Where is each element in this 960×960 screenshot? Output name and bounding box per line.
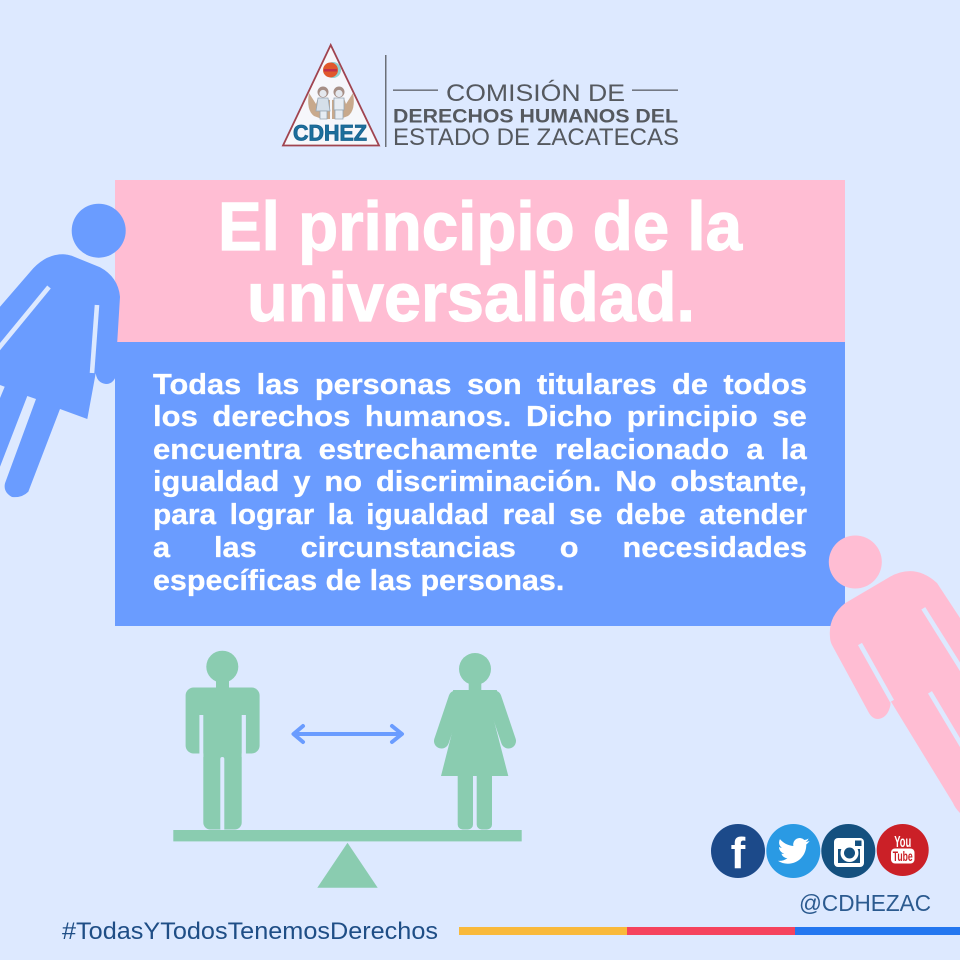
logo text: DERECHOS HUMANOS DEL — [393, 106, 678, 128]
icon: logo sun — [323, 62, 341, 78]
icon: youtube: Tube — [893, 848, 913, 864]
icon: instagram — [821, 824, 875, 878]
logo: CDHEZ — [283, 45, 679, 151]
icon: facebook: f — [731, 829, 746, 878]
logo text: ESTADO DE ZACATECAS — [393, 124, 679, 151]
scale fulcrum — [317, 843, 378, 888]
icon: logo triangle — [283, 45, 379, 146]
body text: encuentra estrechamente relacionado a la — [153, 434, 807, 466]
logo text — [393, 80, 679, 151]
icon: youtube: You — [894, 834, 911, 851]
logo side rule left — [393, 90, 438, 91]
body text: a las circunstancias o necesidades — [153, 532, 807, 564]
body text: específicas de las personas. — [153, 564, 564, 596]
icon: pink man figure — [829, 536, 960, 813]
icon: blue woman figure — [0, 204, 126, 497]
icon: youtube — [877, 824, 929, 876]
icon: twitter — [766, 824, 820, 878]
body text: igualdad y no discriminación. No obstante, — [153, 466, 807, 498]
hashtag: #TodasYTodosTenemosDerechos — [62, 918, 438, 945]
logo text: COMISIÓN DE — [446, 80, 625, 107]
logo acronym: CDHEZ — [293, 120, 367, 146]
panel: body background — [115, 342, 845, 626]
icon: green woman — [441, 653, 508, 830]
title: universalidad. — [247, 259, 695, 336]
panel: title background — [115, 180, 845, 342]
body text: los derechos humanos. Dicho principio se — [153, 401, 807, 433]
chart: balance scale — [173, 651, 522, 888]
body text: Todas las personas son titulares de todos — [153, 368, 807, 400]
icon: logo hands and people — [308, 86, 354, 119]
social handle: @CDHEZAC — [799, 890, 931, 916]
body text: para lograr la igualdad real se debe atender — [153, 498, 807, 530]
icon: facebook — [711, 824, 765, 878]
footer colour bar — [459, 927, 960, 935]
title — [218, 188, 743, 336]
logo divider — [385, 55, 386, 147]
body text — [153, 368, 808, 596]
scale beam — [173, 830, 522, 841]
title: El principio de la — [218, 188, 743, 265]
icon: green man — [186, 651, 260, 831]
arrow: double-headed equality — [294, 726, 402, 742]
logo side rule right — [632, 90, 678, 91]
